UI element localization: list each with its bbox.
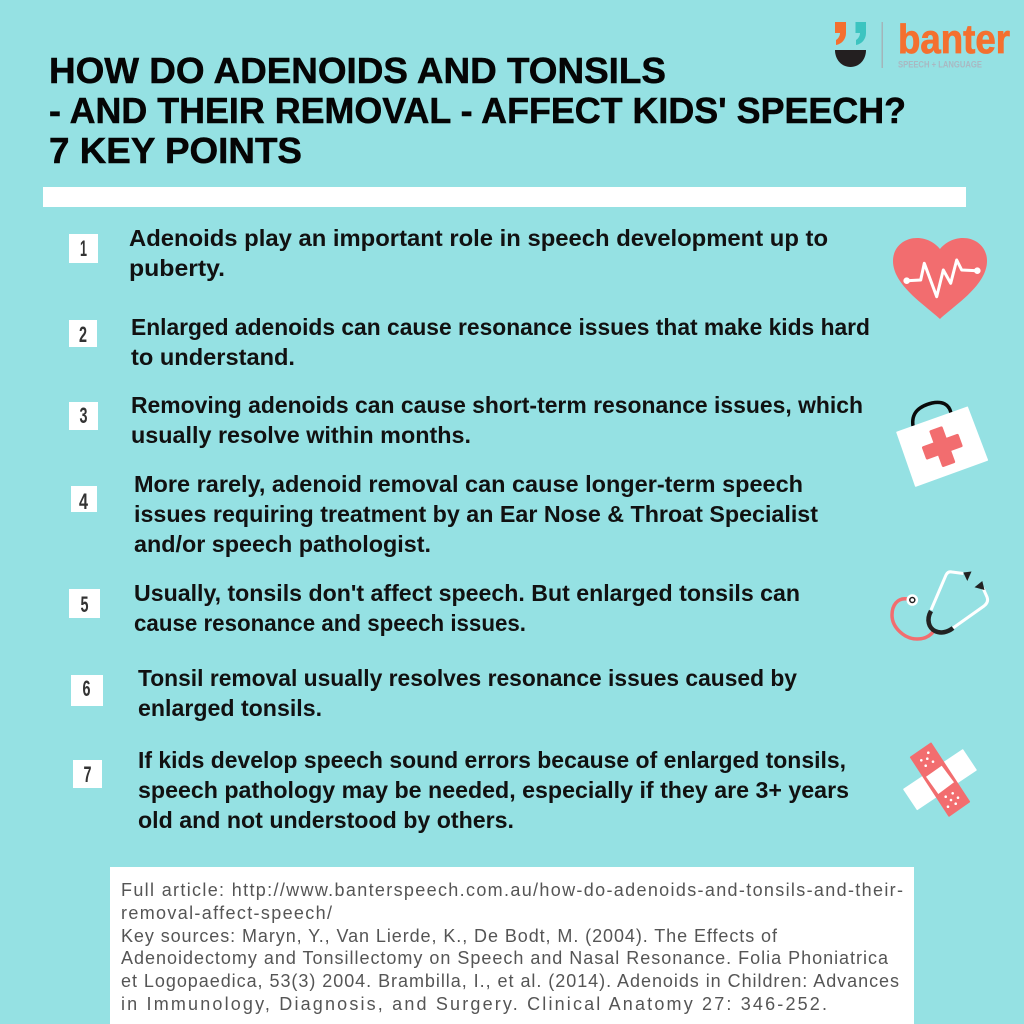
point 1 text: [129, 225, 828, 281]
point 3 text: [131, 392, 863, 448]
title: HOW DO ADENOIDS AND TONSILS: [49, 50, 666, 91]
point 7: [73, 747, 849, 833]
point 1 text: puberty.: [129, 255, 225, 281]
point 3 text: Removing adenoids can cause short-term resonance issues, which: [131, 392, 863, 418]
point 7 text: speech pathology may be needed, especially if they are 3+ years: [138, 777, 849, 803]
number badge 3: [69, 402, 98, 430]
point 2 text: [131, 314, 870, 370]
point 5 text: Usually, tonsils don't affect speech. But enlarged tonsils can: [134, 580, 800, 606]
logo: banter speech and language: SPEECH + LANGUAGE: [898, 59, 982, 69]
number badge 1: 1: [80, 236, 87, 261]
point 6: [71, 665, 797, 721]
logo: banter speech and language: banter: [898, 16, 1010, 62]
number badge 6: 6: [82, 676, 90, 701]
point 2 text: to understand.: [131, 344, 295, 370]
point 7 text: old and not understood by others.: [138, 807, 514, 833]
panel: article and sources: [110, 867, 914, 1024]
number badge 7: 7: [84, 762, 92, 787]
panel: article and sources: et Logopaedica, 53(3) 2004. Brambilla, I., et al. (2014). Adenoids in Children: Advances: [121, 971, 899, 991]
number badge 7: [73, 760, 102, 788]
title: 7 KEY POINTS: [49, 130, 302, 171]
title: [49, 50, 906, 171]
icon: heart with pulse: [893, 238, 987, 319]
icon: first aid kit: [897, 402, 987, 486]
number badge 5: 5: [80, 592, 88, 617]
number badge 5: [69, 589, 100, 618]
white divider bar: [43, 187, 966, 207]
icon: stethoscope: [892, 572, 988, 639]
point 6 text: Tonsil removal usually resolves resonance issues caused by: [138, 665, 797, 691]
point 4 text: [134, 471, 818, 557]
point 6 text: enlarged tonsils.: [138, 695, 322, 721]
point 6 text: [138, 665, 797, 721]
panel: article and sources: Full article: http://www.banterspeech.com.au/how-do-adenoids-and-tonsils-and-their-: [121, 880, 903, 900]
point 2: [69, 314, 870, 370]
point 7 text: If kids develop speech sound errors because of enlarged tonsils,: [138, 747, 846, 773]
number badge 6: [71, 675, 103, 706]
icon: bandage: [904, 743, 976, 816]
point 1: [69, 225, 828, 281]
number badge 2: [69, 320, 97, 347]
number badge 4: [71, 486, 97, 514]
point 5: [69, 580, 800, 636]
logo: banter speech and language: [835, 16, 1010, 69]
point 4 text: More rarely, adenoid removal can cause longer-term speech: [134, 471, 803, 497]
point 5 text: cause resonance and speech issues.: [134, 610, 526, 636]
panel: article and sources: in Immunology, Diagnosis, and Surgery. Clinical Anatomy 27: 346-252.: [121, 994, 827, 1014]
number badge 2: 2: [79, 322, 87, 347]
point 4: [71, 471, 818, 557]
point 4 text: issues requiring treatment by an Ear Nose & Throat Specialist: [134, 501, 818, 527]
point 4 text: and/or speech pathologist.: [134, 531, 431, 557]
point 7 text: [138, 747, 849, 833]
point 5 text: [134, 580, 800, 636]
point 3: [69, 392, 863, 448]
point 3 text: usually resolve within months.: [131, 422, 471, 448]
number badge 4: 4: [79, 489, 89, 514]
point 2 text: Enlarged adenoids can cause resonance issues that make kids hard: [131, 314, 870, 340]
number badge 1: [69, 234, 98, 263]
panel: article and sources: Key sources: Maryn, Y., Van Lierde, K., De Bodt, M. (2004). The Effects of: [121, 926, 778, 946]
panel: article and sources: Adenoidectomy and Tonsillectomy on Speech and Nasal Resonance. Folia Phoniatrica: [121, 948, 889, 968]
number badge 3: 3: [80, 403, 88, 428]
panel: article and sources: removal-affect-speech/: [121, 903, 332, 923]
title: - AND THEIR REMOVAL - AFFECT KIDS' SPEECH?: [49, 90, 906, 131]
point 1 text: Adenoids play an important role in speech development up to: [129, 225, 828, 251]
